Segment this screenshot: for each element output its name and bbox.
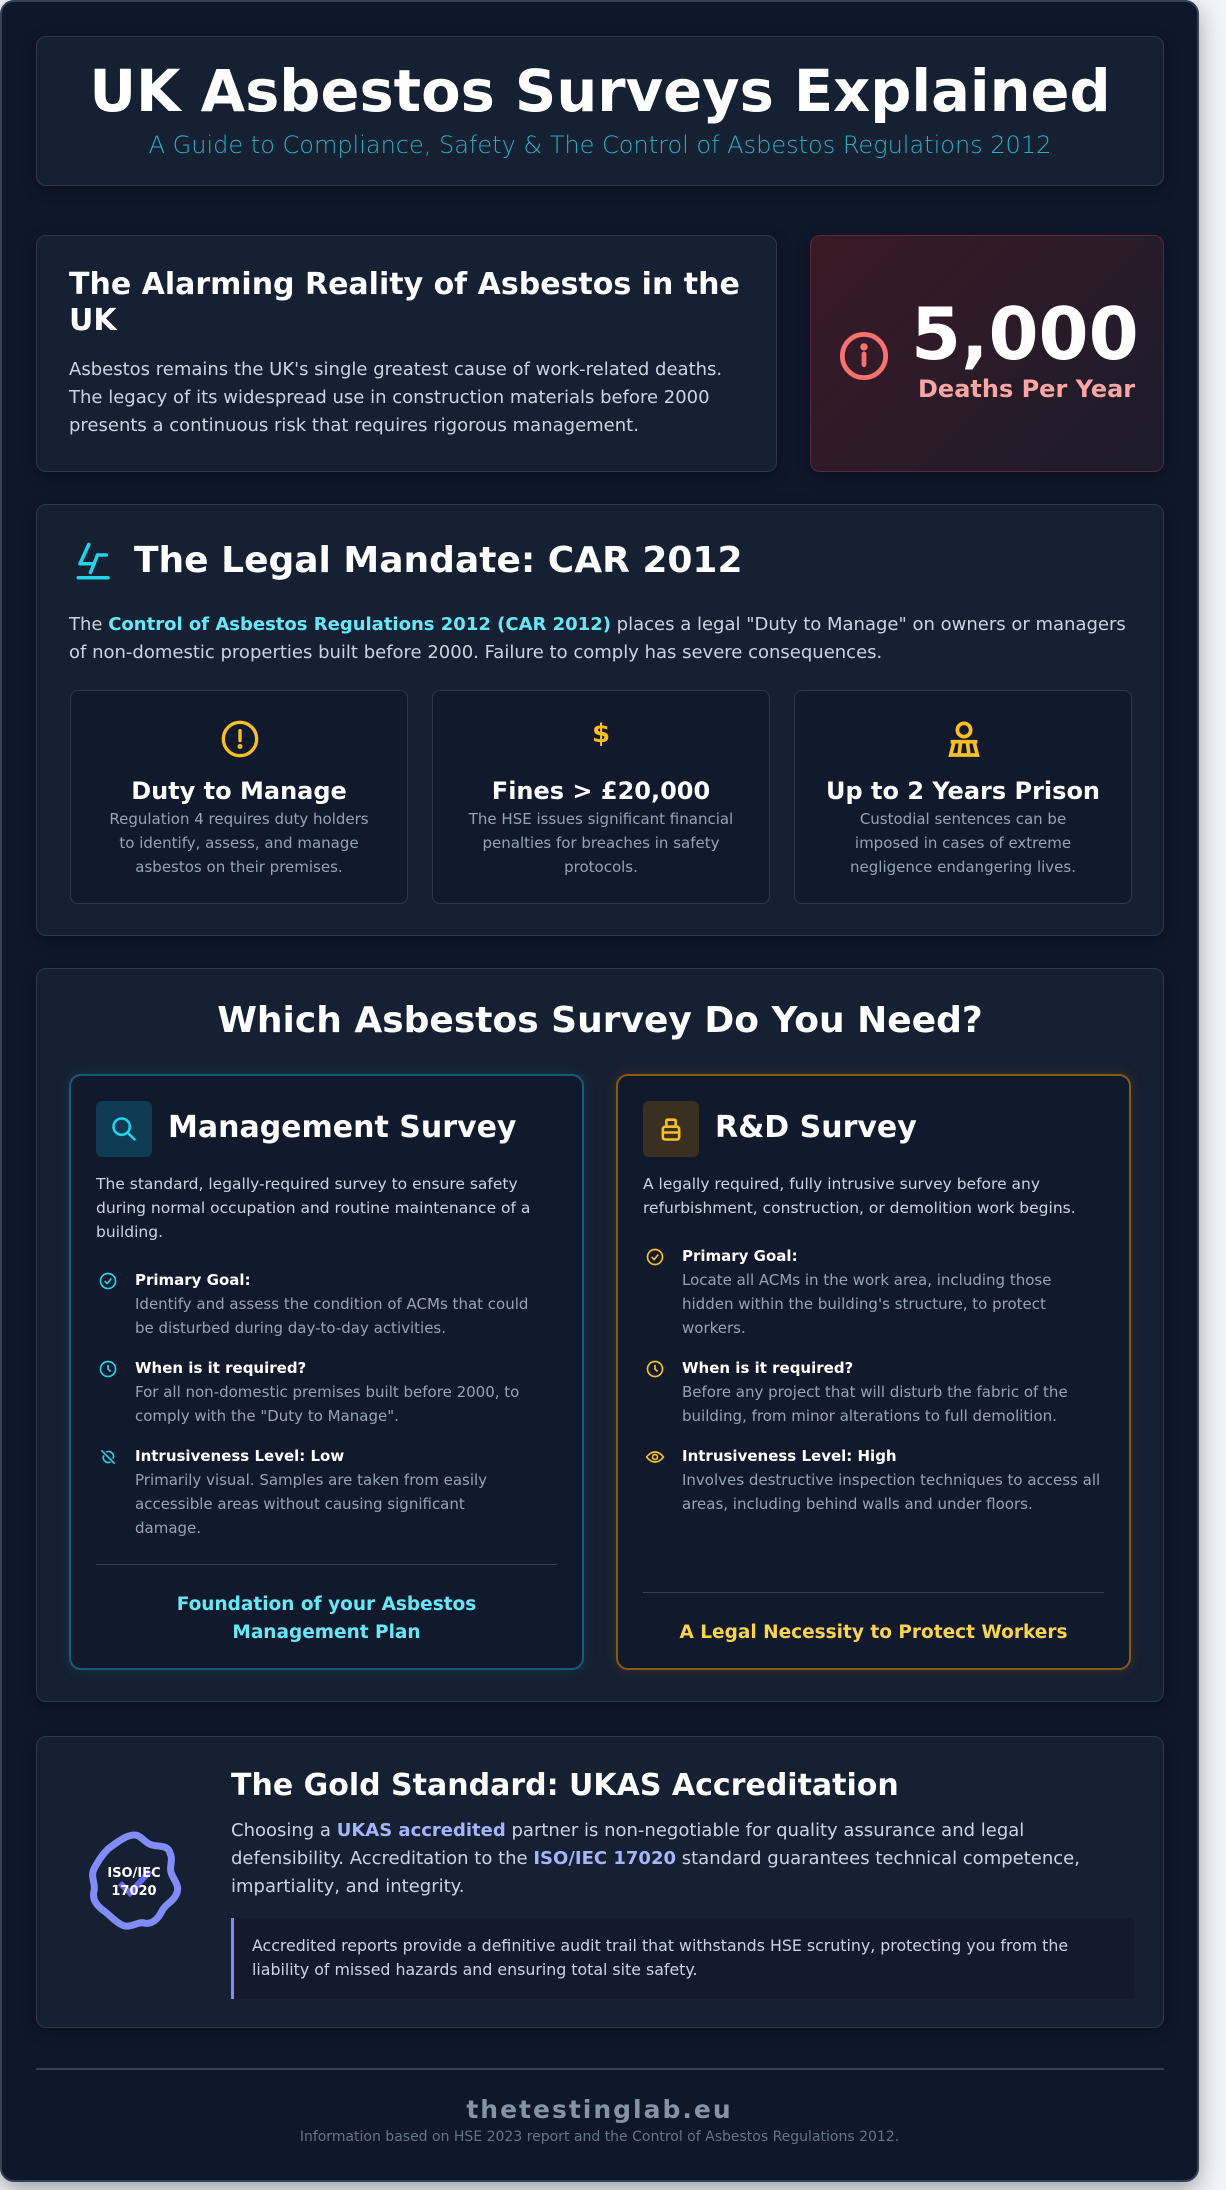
item: primary goal: Primary Goal: xyxy=(682,1247,798,1265)
heading: The Legal Mandate: CAR 2012 xyxy=(134,540,743,581)
heading: The Gold Standard: UKAS Accreditation xyxy=(231,1768,899,1803)
panel: stat 5,000 xyxy=(810,235,1164,472)
card: duty to manage: Duty to Manage xyxy=(131,777,347,805)
item: intrusiveness high xyxy=(646,1447,1100,1513)
icon: search xyxy=(96,1101,152,1157)
item: when required xyxy=(646,1359,1068,1425)
card: prison: Custodial sentences can be imposed in cases of extreme negligence endangering lives. xyxy=(850,810,1076,876)
subtitle: A Guide to Compliance, Safety & The Control of Asbestos Regulations 2012 xyxy=(149,131,1051,159)
footer brand: thetestinglab.eu xyxy=(466,2095,733,2124)
item: intrusiveness low: Primarily visual. Samples are taken from easily accessible areas without causing significant damage. xyxy=(135,1471,487,1537)
icon: alert xyxy=(222,720,258,758)
panel: alarming reality xyxy=(36,235,777,472)
footer text: Management Plan xyxy=(232,1622,421,1643)
description: The standard, legally-required survey to ensure safety during normal occupation and routine maintenance of a building. xyxy=(96,1175,530,1241)
heading: The Alarming Reality of Asbestos in the UK xyxy=(69,267,740,338)
callout quote xyxy=(231,1918,1134,1999)
item: primary goal: Identify and assess the condition of ACMs that could be disturbed during day-to-day activities. xyxy=(135,1295,528,1337)
icon: badge: ISO/IEC xyxy=(107,1866,161,1881)
description: A legally required, fully intrusive survey before any refurbishment, construction, or demolition work begins. xyxy=(643,1175,1076,1217)
title: Management Survey xyxy=(168,1110,516,1145)
callout quote: Accredited reports provide a definitive audit trail that withstands HSE scrutiny, protecting you from the liability of missed hazards and ensuring total site safety. xyxy=(252,1936,1068,1979)
item: when required: Before any project that will disturb the fabric of the building, from minor alterations to full demolition. xyxy=(682,1383,1068,1425)
stat label: Deaths Per Year xyxy=(918,375,1135,403)
card: duty to manage xyxy=(70,690,408,904)
icon: person xyxy=(948,722,980,757)
divider xyxy=(643,1592,1104,1593)
panel: survey comparison xyxy=(36,968,1164,1702)
intro text: The Control of Asbestos Regulations 2012 (CAR 2012) places a legal "Duty to Manage" on owners or managers of non-domestic properties built before 2000. Failure to comply has severe consequences. xyxy=(69,614,1126,663)
heading: Which Asbestos Survey Do You Need? xyxy=(217,1000,983,1041)
item: primary goal: Locate all ACMs in the work area, including those hidden within the building's structure, to protect workers. xyxy=(682,1271,1051,1337)
icon: toolbox xyxy=(643,1101,699,1157)
footer text xyxy=(177,1594,476,1643)
item: when required: For all non-domestic premises built before 2000, to comply with the "Duty to Manage". xyxy=(135,1383,519,1425)
item: when required: When is it required? xyxy=(682,1359,853,1377)
stat number: 5,000 xyxy=(911,292,1139,376)
item: primary goal: Primary Goal: xyxy=(135,1271,251,1289)
item: when required xyxy=(100,1359,519,1425)
item: intrusiveness high: Intrusiveness Level: High xyxy=(682,1447,897,1465)
item: intrusiveness low xyxy=(100,1447,487,1537)
item: primary goal xyxy=(646,1247,1051,1337)
icon: badge xyxy=(89,1832,182,1930)
card: fines: The HSE issues significant financial penalties for breaches in safety protocols. xyxy=(469,810,733,876)
footer text: Foundation of your Asbestos xyxy=(177,1594,476,1615)
body text: Asbestos remains the UK's single greatest cause of work-related deaths. The legacy of its widespread use in construction materials before 2000 presents a continuous risk that requires rigorous management. xyxy=(69,359,722,436)
item: intrusiveness high: Involves destructive inspection techniques to access all areas, including behind walls and under floors. xyxy=(682,1471,1100,1513)
card: duty to manage: Regulation 4 requires duty holders to identify, assess, and manage asbestos on their premises. xyxy=(109,810,369,876)
header panel xyxy=(36,36,1164,186)
item: primary goal xyxy=(100,1271,528,1337)
card: fines xyxy=(432,690,770,904)
panel: UKAS accreditation xyxy=(36,1736,1164,2028)
icon: dollar: $ xyxy=(592,719,610,749)
panel: legal mandate xyxy=(36,504,1164,936)
footer divider xyxy=(36,2068,1164,2070)
item: when required: When is it required? xyxy=(135,1359,306,1377)
icon: badge: 17020 xyxy=(111,1884,157,1899)
body text: Choosing a UKAS accredited partner is non-negotiable for quality assurance and legal defensibility. Accreditation to the ISO/IEC 17020 standard guarantees technical competence, impartiality, and integrity. xyxy=(231,1820,1080,1897)
icon: scale xyxy=(76,542,110,580)
title: UK Asbestos Surveys Explained xyxy=(89,58,1111,125)
icon: info xyxy=(840,332,888,380)
card: prison: Up to 2 Years Prison xyxy=(826,777,1100,805)
item: intrusiveness low: Intrusiveness Level: Low xyxy=(135,1447,344,1465)
card: management survey xyxy=(69,1074,584,1670)
card: prison xyxy=(794,690,1132,904)
title: R&D Survey xyxy=(715,1110,917,1145)
footer note: Information based on HSE 2023 report and the Control of Asbestos Regulations 2012. xyxy=(300,2129,899,2145)
footer text: A Legal Necessity to Protect Workers xyxy=(680,1622,1067,1643)
card: R&D survey xyxy=(616,1074,1131,1670)
divider xyxy=(96,1564,557,1565)
card: fines: Fines > £20,000 xyxy=(492,777,710,805)
